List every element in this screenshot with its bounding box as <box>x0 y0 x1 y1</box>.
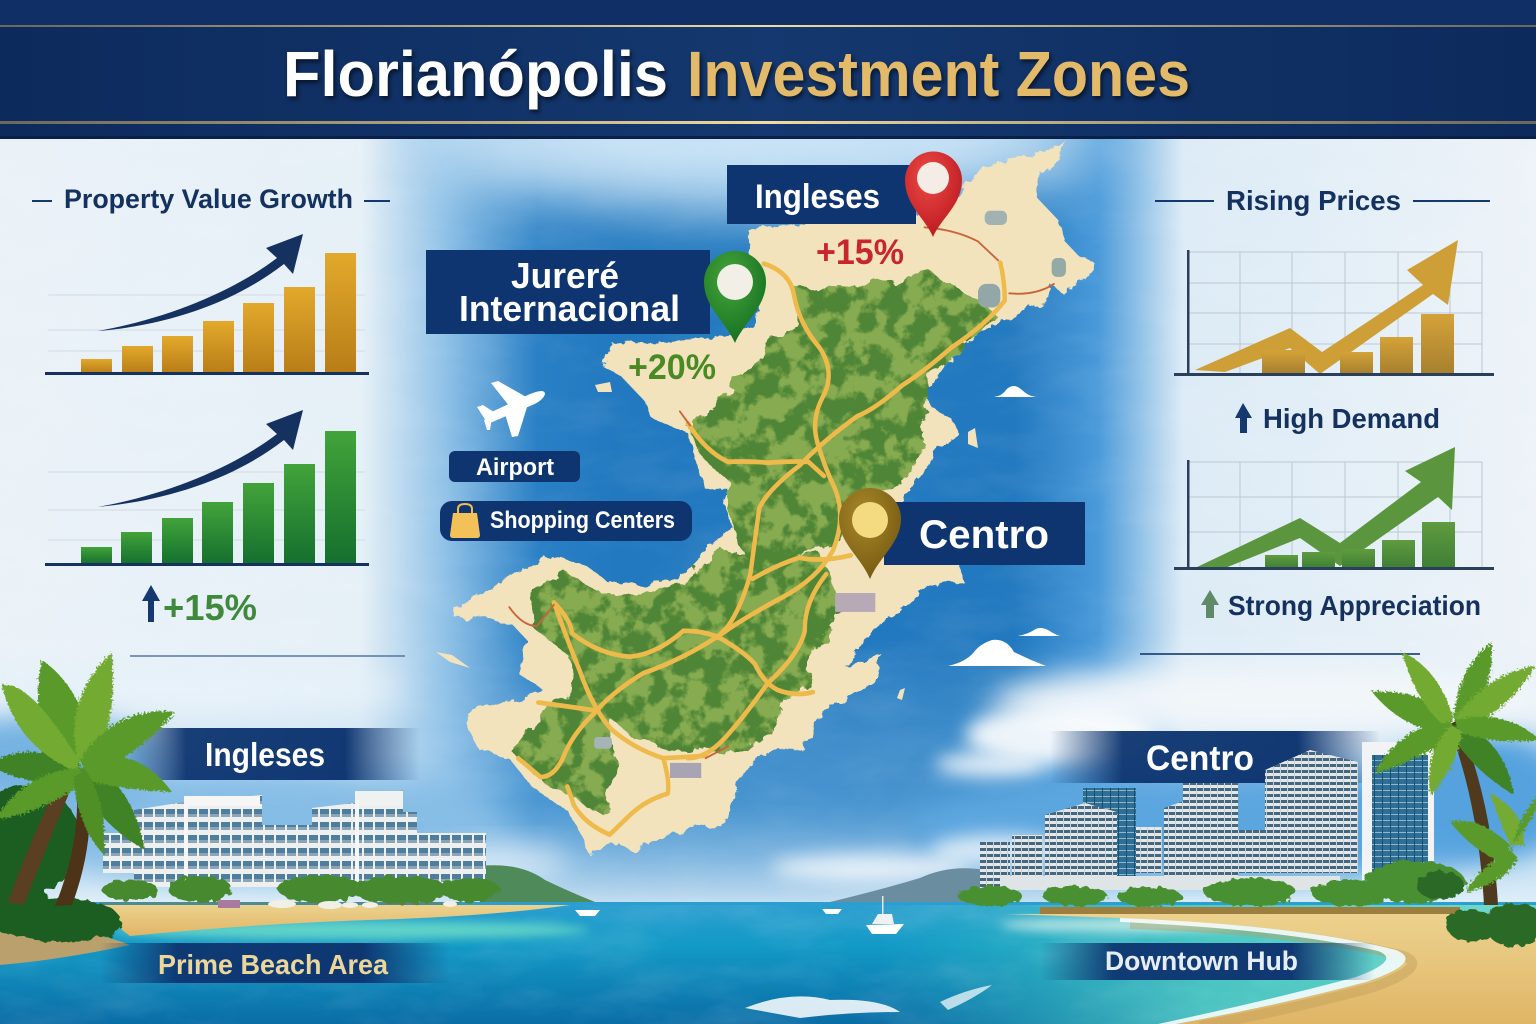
callout: Ingleses map label: Ingleses <box>755 178 880 216</box>
callout: Jureré Internacional map label: Internacional <box>459 288 680 329</box>
left beach <box>0 905 590 965</box>
panel: rising prices <box>1140 185 1494 655</box>
strong appreciation label: Strong Appreciation <box>1228 590 1481 621</box>
panel heading: Rising Prices <box>1226 185 1401 216</box>
label: airport: Airport <box>476 454 554 481</box>
icon: gold map pin <box>839 488 901 579</box>
callout: Centro map label: Centro <box>919 513 1049 557</box>
callout: Jureré Internacional map label: +20% <box>628 348 716 387</box>
banner: Centro zone <box>1050 731 1380 783</box>
gold bar chart <box>45 234 369 375</box>
banner: Downtown Hub: Downtown Hub <box>1105 946 1298 976</box>
building complex: Ingleses <box>103 790 486 887</box>
trees and beach umbrellas: Ingleses <box>100 875 500 909</box>
forest areas <box>509 270 996 815</box>
icon: red map pin <box>905 152 962 237</box>
callout: Ingleses map label <box>727 152 962 272</box>
islets and clouds over the sea <box>436 382 1060 700</box>
banner: Prime Beach Area <box>100 943 450 983</box>
callout: Jureré Internacional map label: Jureré <box>511 255 619 296</box>
gold line chart <box>1174 240 1494 376</box>
foreground foliage left <box>0 785 122 942</box>
icon: green map pin <box>704 251 766 343</box>
building towers: Centro <box>980 742 1434 890</box>
green line chart <box>1174 447 1494 570</box>
banner: Centro zone: Centro <box>1146 739 1254 778</box>
banner: Prime Beach Area: Prime Beach Area <box>158 949 388 980</box>
callout: Jureré Internacional map label <box>426 250 766 387</box>
label: shopping centers: Shopping Centers <box>490 507 675 534</box>
right beach <box>1005 914 1536 1024</box>
growth figure: +15% <box>163 587 257 628</box>
green bar chart <box>45 410 369 566</box>
label: shopping centers <box>440 501 692 541</box>
title banner <box>0 0 1536 139</box>
icon: airplane <box>477 381 545 437</box>
land mass <box>453 140 1095 855</box>
banner: Ingleses zone <box>120 728 420 780</box>
palm tree right <box>1372 642 1536 905</box>
hills <box>480 865 985 902</box>
beach scene <box>0 642 1536 1024</box>
trees and promenade: Centro <box>958 861 1465 914</box>
callout: Centro map label <box>839 488 1085 579</box>
title text: Florianópolis <box>283 38 668 110</box>
title accent text: Investment Zones <box>687 38 1190 110</box>
smaller palm right <box>1450 793 1536 892</box>
high demand label: High Demand <box>1263 403 1440 434</box>
callout: Ingleses map label: +15% <box>816 233 904 272</box>
foreground foliage right <box>1416 871 1536 947</box>
banner: Ingleses zone: Ingleses <box>205 736 325 773</box>
sea <box>0 902 1536 1024</box>
panel heading: Property Value Growth <box>64 184 353 214</box>
map of the island <box>436 140 1095 855</box>
roads <box>509 227 1054 835</box>
banner: Downtown Hub <box>1040 943 1375 980</box>
panel: property value growth <box>32 184 405 657</box>
icon: shopping bag <box>450 504 480 538</box>
icon: boats <box>575 896 904 934</box>
palm tree left <box>0 652 175 906</box>
city and lake patches <box>594 211 1066 778</box>
label: airport <box>449 451 580 482</box>
